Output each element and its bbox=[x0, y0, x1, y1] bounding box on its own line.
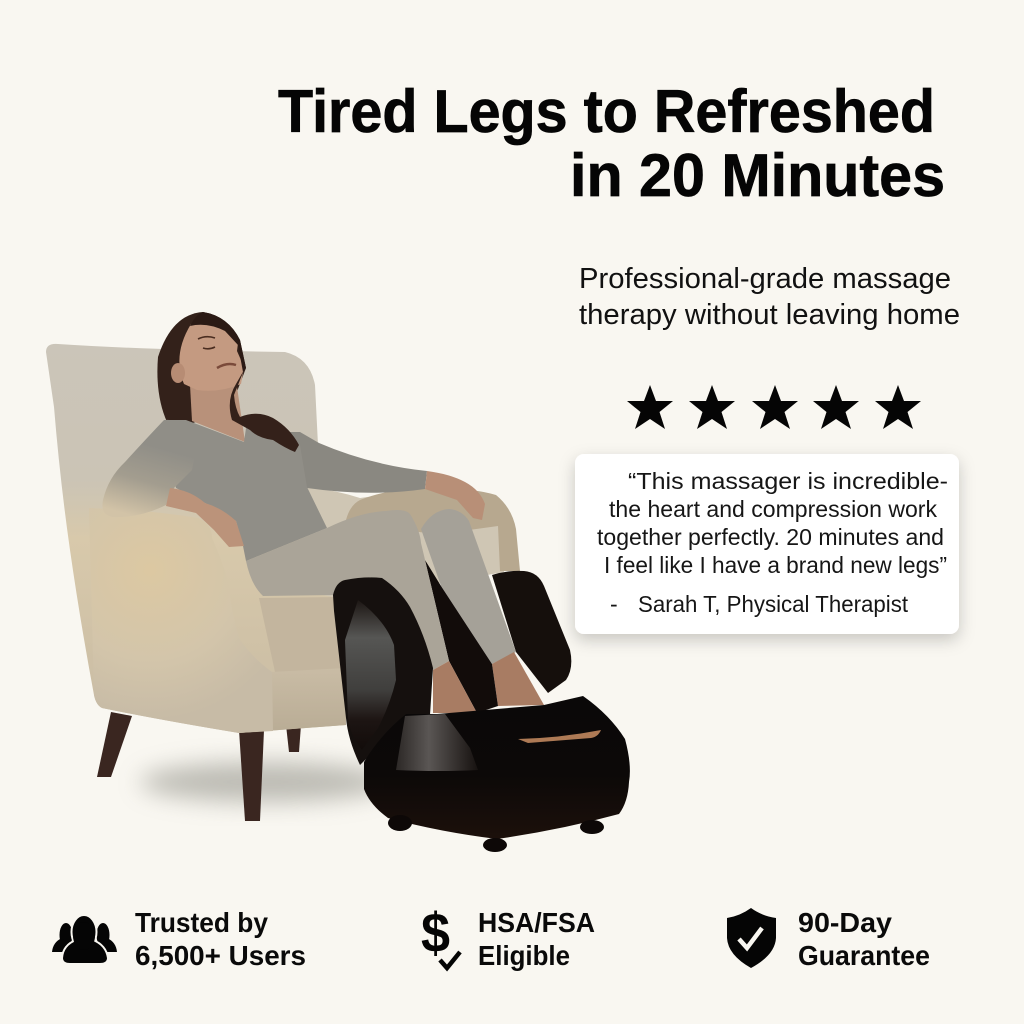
hair right strand bbox=[230, 370, 299, 452]
title: in 20 Minutes bbox=[570, 142, 945, 209]
testimonial card: Sarah T, Physical Therapist bbox=[638, 591, 909, 617]
hair back bbox=[157, 312, 246, 424]
testimonial card: the heart and compression work bbox=[609, 496, 937, 522]
base window bbox=[396, 714, 478, 771]
label bbox=[798, 907, 930, 971]
front arm bbox=[89, 508, 273, 733]
ear bbox=[171, 363, 185, 383]
far arm bbox=[300, 487, 504, 600]
copper strip bbox=[518, 730, 601, 743]
chair legs bbox=[97, 712, 301, 821]
label bbox=[478, 907, 595, 971]
icon: users bbox=[52, 915, 117, 964]
far foot bbox=[492, 652, 544, 706]
label: 90-Day bbox=[798, 907, 893, 938]
blanket bbox=[346, 489, 520, 571]
label: HSA/FSA bbox=[478, 907, 595, 938]
near sleeve bbox=[102, 420, 198, 517]
chair back bbox=[46, 344, 346, 733]
subtitle bbox=[579, 263, 960, 331]
icon: dollar check: $ bbox=[421, 901, 450, 964]
far hand bbox=[425, 471, 485, 520]
massager base bbox=[364, 696, 630, 839]
label: 6,500+ Users bbox=[135, 940, 306, 971]
badge: HSA/FSA eligible bbox=[421, 901, 595, 971]
floor shadow bbox=[140, 762, 390, 802]
centre massager wing bbox=[425, 560, 498, 713]
closed eyes, brow, lips bbox=[198, 337, 236, 368]
badge: trusted by users bbox=[52, 907, 306, 971]
icon: shield check bbox=[727, 908, 776, 968]
neck bbox=[190, 380, 245, 442]
label: Trusted by bbox=[135, 907, 269, 938]
wing window bbox=[345, 600, 396, 750]
label: Eligible bbox=[478, 940, 570, 971]
subtitle: therapy without leaving home bbox=[579, 299, 960, 331]
title bbox=[278, 78, 945, 209]
label: Guarantee bbox=[798, 940, 930, 971]
label bbox=[135, 907, 306, 971]
far sleeve bbox=[280, 432, 427, 493]
base panel bbox=[239, 668, 346, 733]
near forearm and hand bbox=[166, 488, 244, 547]
illustration: woman in armchair with foot massager bbox=[46, 312, 630, 852]
testimonial card: “This massager is incredible- bbox=[628, 468, 948, 494]
seat cushion bbox=[259, 597, 340, 672]
badge: 90-day guarantee bbox=[727, 907, 930, 971]
near leg bbox=[246, 510, 449, 670]
five star rating bbox=[627, 385, 921, 429]
far leg bbox=[421, 509, 516, 664]
base feet bbox=[388, 815, 604, 852]
testimonial card bbox=[575, 454, 959, 634]
testimonial card: - bbox=[610, 591, 618, 617]
hair front strands bbox=[190, 312, 246, 372]
title: Tired Legs to Refreshed bbox=[278, 78, 935, 145]
near foot bbox=[433, 661, 477, 713]
subtitle: Professional-grade massage bbox=[579, 263, 951, 295]
far massager wing bbox=[492, 571, 571, 693]
testimonial card: together perfectly. 20 minutes and bbox=[597, 524, 944, 550]
testimonial card: I feel like I have a brand new legs” bbox=[604, 552, 947, 578]
face bbox=[179, 323, 244, 391]
near massager wing bbox=[333, 577, 433, 765]
torso bbox=[164, 420, 327, 561]
